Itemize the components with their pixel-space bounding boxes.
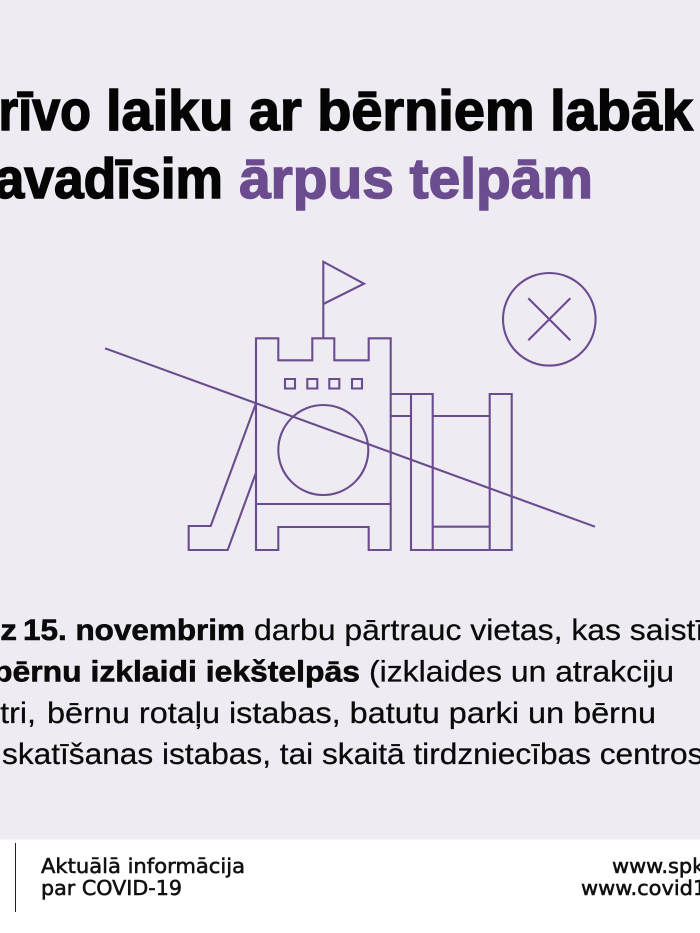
title: ārpus telpām <box>239 147 593 211</box>
slide <box>189 403 256 550</box>
body text: (izklaides un atrakciju <box>369 656 674 688</box>
title: laiku ar bērniem labāk <box>106 79 693 143</box>
icon: flag <box>323 262 364 338</box>
body text: bērnu rotaļu istabas, batutu parki un bērnu <box>47 697 656 730</box>
footer label <box>41 854 245 900</box>
body text: bērnu izklaidi iekštelpās <box>0 656 360 688</box>
illustration: crossed-out playground castle <box>105 262 596 550</box>
body text: skatīšanas istabas, tai skaitā tirdzniecības centros) <box>2 738 700 771</box>
castle tower <box>256 338 391 550</box>
footer websites <box>581 854 700 900</box>
footer divider <box>15 843 16 912</box>
icon: circled cross <box>503 273 596 366</box>
castle round opening <box>278 405 368 495</box>
footer label: Aktuālā informācija <box>41 854 245 878</box>
crossing-out diagonal line <box>105 348 595 527</box>
footer <box>0 840 700 933</box>
castle floor line <box>256 503 391 505</box>
climbing frame <box>391 394 512 550</box>
footer white band <box>0 840 700 933</box>
body text: 15. novembrim <box>23 614 245 647</box>
title <box>0 79 693 211</box>
footer label: par COVID-19 <box>41 876 182 900</box>
castle windows <box>285 379 362 388</box>
body text <box>0 614 700 771</box>
